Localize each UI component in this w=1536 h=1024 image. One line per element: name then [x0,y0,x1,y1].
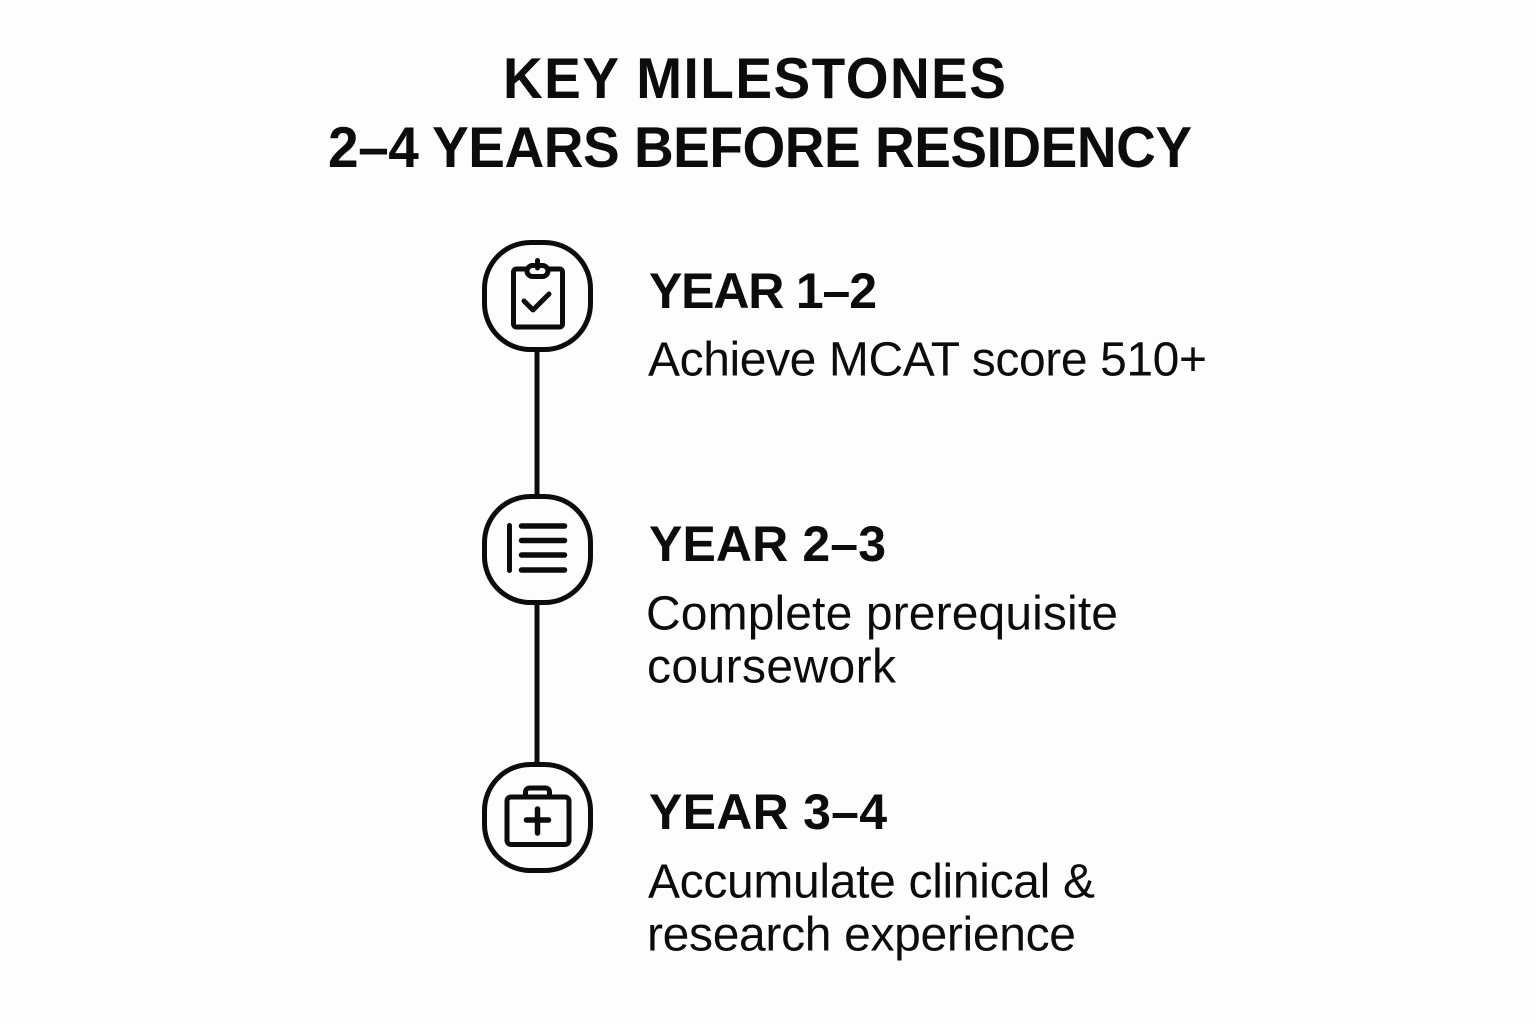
title: 2–4 YEARS BEFORE RESIDENCY [328,115,1192,179]
milestone text: year 3-4 [647,784,1095,962]
milestone text: year 1-2: YEAR 1–2 [649,263,877,319]
icon: medical case with plus [484,764,590,870]
milestone text: year 3-4: research experience [647,908,1076,962]
milestone text: year 3-4: Accumulate clinical & [648,856,1095,908]
milestone text: year 2-3: Complete prerequisite [646,588,1118,640]
milestone text: year 1-2: Achieve MCAT score 510+ [648,334,1207,386]
milestone text: year 3-4: YEAR 3–4 [649,784,887,840]
title: KEY MILESTONES [503,46,1006,110]
milestone text: year 2-3: coursework [647,640,897,694]
milestone text: year 2-3: YEAR 2–3 [649,516,886,572]
title [328,46,1192,179]
icon: list lines [484,496,590,602]
timeline connector: year 2-3 to year 3-4 [534,603,540,764]
milestone text: year 1-2 [648,263,1207,386]
milestone text: year 2-3 [646,516,1118,694]
icon: clipboard with check [484,242,590,350]
timeline connector: year 1-2 to year 2-3 [534,350,540,496]
